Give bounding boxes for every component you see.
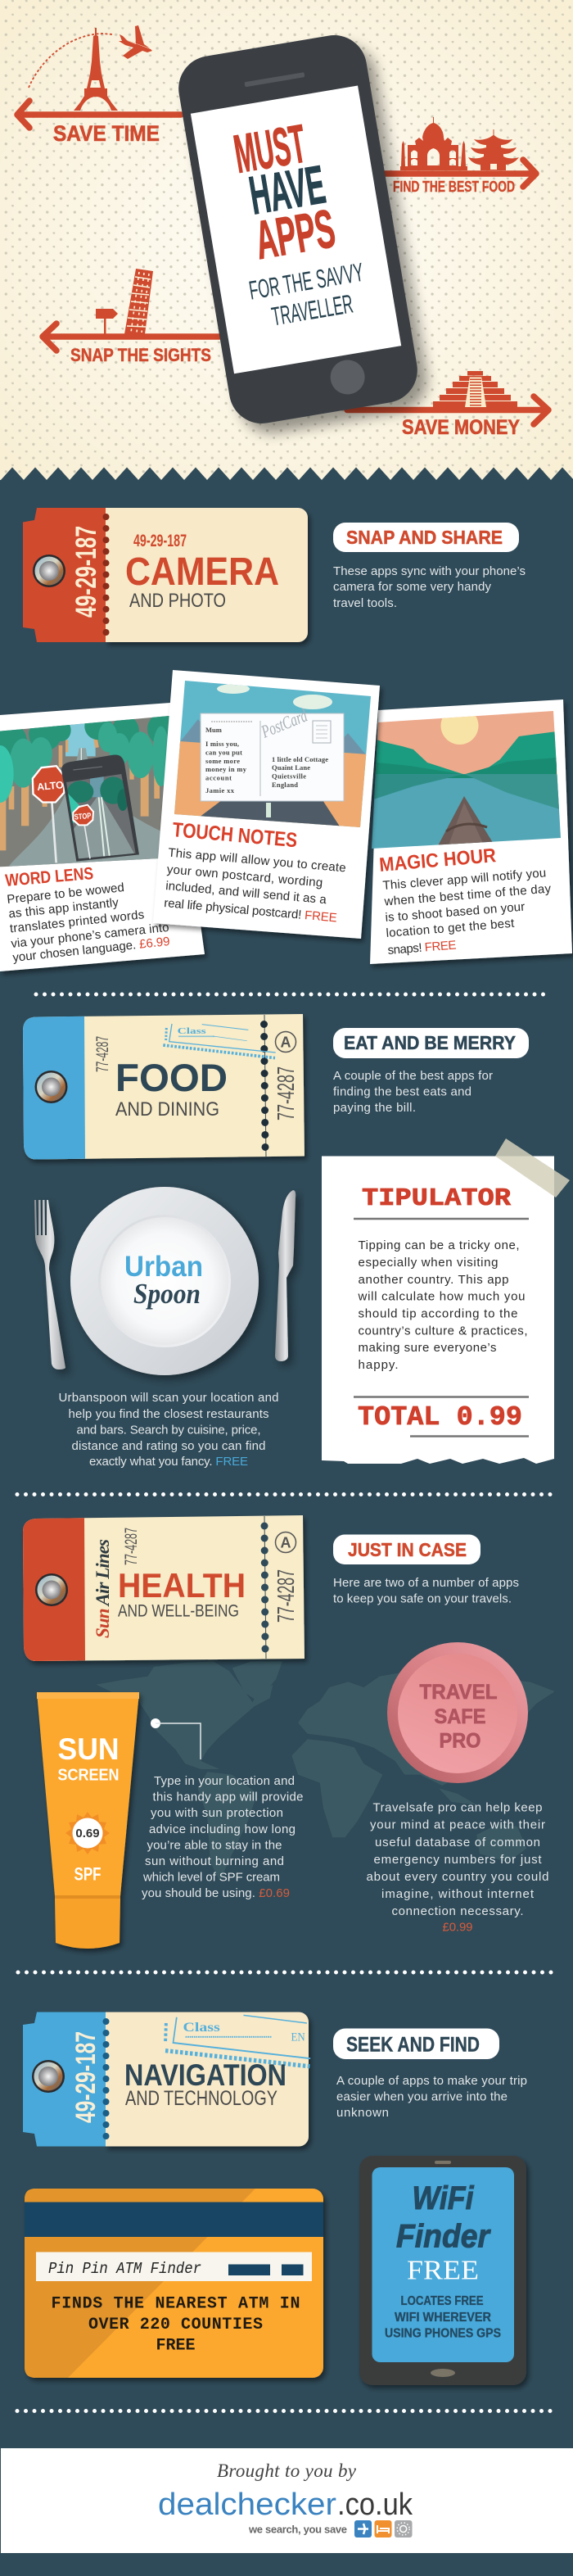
bank card: pin pin ATM finder: Pin Pin ATM Finder xyxy=(48,2260,201,2278)
bank card: pin pin ATM finder: FREE xyxy=(156,2336,195,2356)
text: travelsafe description xyxy=(367,1800,548,1935)
phone with title: APPS xyxy=(250,197,339,270)
tablet: wifi finder: LOCATES FREE xyxy=(401,2294,484,2308)
bank card: pin pin ATM finder xyxy=(25,2189,323,2378)
text: travelsafe description: Travelsafe pro can help keep xyxy=(373,1800,542,1815)
ticket: food and dining: 77-4287 xyxy=(93,1036,112,1072)
tablet: wifi finder: Finder xyxy=(396,2218,491,2254)
polaroid: word lens: Prepare to be wowed xyxy=(7,881,125,907)
heading: eat and be merry xyxy=(333,1028,529,1058)
ticket: health and well-being: A xyxy=(280,1535,291,1551)
bank card: pin pin ATM finder: OVER 220 COUNTIES xyxy=(88,2316,263,2334)
footer: dealchecker xyxy=(1,2448,573,2553)
road scene with phone and stop signs: STOP xyxy=(74,812,92,822)
polaroid: touch notes: real life physical postcard! FREE xyxy=(164,896,337,925)
postcard: Mum xyxy=(205,726,222,734)
polaroid: touch notes: This app will allow you to create xyxy=(168,846,346,875)
receipt: tipulator xyxy=(322,1139,570,1464)
receipt: tipulator: should tip according to the xyxy=(359,1307,517,1320)
text: sun protection description: Type in your location and xyxy=(154,1774,295,1788)
polaroid: word lens: as this app instantly xyxy=(8,895,120,921)
ticket: navigation and technology: NAVIGATION xyxy=(124,2058,286,2092)
heading: eat and be merry: EAT AND BE MERRY xyxy=(344,1032,516,1053)
ticket: health and well-being: 77-4287 xyxy=(122,1528,141,1565)
postcard: I miss you, xyxy=(205,740,239,748)
tablet: wifi finder: WiFi xyxy=(413,2180,474,2216)
postcard: can you put xyxy=(205,749,242,757)
phone with title xyxy=(174,30,432,438)
text: navigation intro: easier when you arrive into the xyxy=(336,2090,508,2103)
text: travelsafe description: connection necessary. xyxy=(391,1904,524,1918)
tablet: wifi finder: USING PHONES GPS xyxy=(385,2326,501,2341)
pill: travel safe pro xyxy=(387,1642,528,1783)
phone with title: MUST xyxy=(230,113,310,184)
ticket: camera and photo: CAMERA xyxy=(125,550,279,594)
polaroid: magic hour: snaps! FREE xyxy=(387,938,457,958)
text: camera intro: camera for some very handy xyxy=(333,580,491,594)
text: navigation intro xyxy=(336,2074,527,2120)
ticket: camera and photo: AND PHOTO xyxy=(129,590,226,612)
arrow: save money with stepped pyramid: SAVE MONEY xyxy=(402,416,520,439)
arrow: snap the sights with Pisa tower: SNAP THE SIGHTS xyxy=(70,345,211,365)
postcard: some more xyxy=(205,757,240,765)
postcard: Quietsville xyxy=(272,772,306,780)
arrow: find the best food with Taj Mahal and pagoda: FIND THE BEST FOOD xyxy=(393,179,515,195)
plate: urban spoon xyxy=(70,1187,259,1375)
ticket: camera and photo xyxy=(23,508,308,642)
receipt: tipulator: especially when visiting xyxy=(359,1256,498,1270)
receipt: tipulator: will calculate how much you xyxy=(357,1289,526,1304)
text: urbanspoon description: help you find the closest restaurants xyxy=(69,1407,268,1421)
postcard: account xyxy=(205,773,232,781)
text: sun protection description: you should be using. £0.69 xyxy=(142,1886,290,1900)
text: travelsafe description: your mind at peace with their xyxy=(370,1818,545,1831)
pill: travel safe pro: TRAVEL xyxy=(419,1681,498,1704)
text: sun protection description: you with sun protection xyxy=(151,1806,283,1820)
text: travelsafe description: useful database of common xyxy=(375,1836,540,1849)
phone with title: HAVE xyxy=(245,153,329,226)
heading: seek and find xyxy=(333,2028,499,2059)
text: travelsafe description: imagine, without internet xyxy=(381,1887,535,1901)
ticket: food and dining: FOOD xyxy=(115,1056,228,1099)
postcard: England xyxy=(272,781,298,789)
tablet: wifi finder: WIFI WHEREVER xyxy=(395,2311,491,2325)
ticket: health and well-being: HEALTH xyxy=(118,1566,246,1605)
pill: travel safe pro: SAFE xyxy=(434,1705,486,1728)
arrow: save time with Eiffel Tower and plane xyxy=(17,25,181,146)
ticket: health and well-being: Sun Air Lines xyxy=(92,1539,113,1638)
receipt: tipulator: TOTAL 0.99 xyxy=(358,1402,522,1433)
text: urbanspoon description: Urbanspoon will scan your location and xyxy=(59,1391,278,1405)
text: navigation intro: A couple of apps to make your trip xyxy=(336,2074,527,2088)
text: urbanspoon description xyxy=(59,1391,278,1469)
polaroid: touch notes: included, and will send it as a xyxy=(165,879,327,907)
ticket: food and dining xyxy=(23,1014,305,1160)
postcard: Quaint Lane xyxy=(272,763,310,772)
text: sun protection description: this handy app will provide xyxy=(152,1791,303,1804)
stamp xyxy=(163,1024,276,1058)
icon: hotels xyxy=(375,2520,391,2538)
text: sun protection description: you’re able to stay in the xyxy=(147,1838,282,1853)
badge: price sunburst xyxy=(65,1812,110,1854)
lake scene with boat xyxy=(372,711,561,849)
heading: seek and find: SEEK AND FIND xyxy=(346,2033,480,2056)
ticket: camera and photo: 49-29-187 xyxy=(133,532,187,550)
postcard: Jamie xx xyxy=(205,786,235,795)
receipt: tipulator: TIPULATOR xyxy=(362,1184,511,1213)
phone with title: TRAVELLER xyxy=(269,288,355,331)
road scene with phone and stop signs xyxy=(0,716,169,867)
plate: urban spoon: Urban xyxy=(124,1251,203,1283)
text: health intro xyxy=(333,1576,519,1605)
polaroid: word lens xyxy=(0,703,205,971)
text: camera intro: These apps sync with your phone’s xyxy=(333,564,526,578)
text: camera intro: travel tools. xyxy=(333,596,397,610)
text: food intro xyxy=(333,1069,493,1115)
receipt: tipulator: Tipping can be a tricky one, xyxy=(359,1238,519,1252)
heading: just in case xyxy=(333,1535,481,1564)
polaroid: touch notes: TOUCH NOTES xyxy=(171,818,298,852)
phone with title: FOR THE SAVVY xyxy=(247,257,366,306)
postcard: money in my xyxy=(205,765,247,773)
tape xyxy=(495,1139,570,1197)
receipt: tipulator: another country. This app xyxy=(359,1273,509,1287)
polaroid: magic hour: MAGIC HOUR xyxy=(378,844,497,876)
receipt: tipulator: country’s culture & practices, xyxy=(359,1324,527,1338)
ticket: food and dining: AND DINING xyxy=(115,1098,219,1120)
polaroid: magic hour: This clever app will notify you xyxy=(382,866,547,893)
text: travelsafe description: emergency numbers for just xyxy=(373,1853,542,1867)
text: sun protection description xyxy=(142,1774,303,1900)
arrow: find the best food with Taj Mahal and pagoda xyxy=(383,117,536,195)
sunscreen tube: SUN xyxy=(57,1732,120,1766)
icon: holidays xyxy=(395,2520,413,2538)
text: food intro: finding the best eats and xyxy=(333,1084,471,1099)
text: travelsafe description: £0.99 xyxy=(442,1920,473,1935)
ticket: camera and photo: 49-29-187 xyxy=(70,526,102,618)
arrow: save money with stepped pyramid xyxy=(347,371,548,439)
icon: knife xyxy=(275,1190,296,1361)
plate: urban spoon: Spoon xyxy=(133,1278,201,1310)
polaroid: magic hour xyxy=(368,699,572,964)
stamp: Class xyxy=(178,1027,206,1036)
stamp xyxy=(165,2015,310,2067)
ticket: navigation and technology: AND TECHNOLOGY xyxy=(125,2087,277,2110)
heading: snap and share: SNAP AND SHARE xyxy=(346,527,503,548)
text: travelsafe description: about every country you could xyxy=(367,1870,548,1884)
ticket: food and dining: 77-4287 xyxy=(273,1066,300,1120)
world map xyxy=(96,1661,555,1881)
polaroid: word lens: via your phone’s camera into xyxy=(11,921,169,951)
postcard: 1 little old Cottage xyxy=(272,755,328,763)
text: camera intro xyxy=(333,564,526,610)
ticket: food and dining: A xyxy=(280,1034,291,1050)
text: sun protection description: which level of SPF cream xyxy=(142,1871,280,1884)
heading: snap and share xyxy=(333,523,519,552)
ticket: health and well-being: 77-4287 xyxy=(273,1569,300,1623)
receipt: tipulator: happy. xyxy=(359,1358,398,1372)
road scene with phone and stop signs: ALTO xyxy=(37,779,65,793)
text: health intro: Here are two of a number of apps xyxy=(333,1576,519,1590)
polaroid: magic hour: is to shoot based on your xyxy=(385,900,526,925)
polaroid: magic hour: when the best time of the day xyxy=(383,881,552,909)
tablet: wifi finder: FREE xyxy=(407,2256,479,2285)
postcard xyxy=(201,704,344,801)
arrow: save time with Eiffel Tower and plane: SAVE TIME xyxy=(53,121,160,146)
hero background xyxy=(0,0,573,491)
text: food intro: paying the bill. xyxy=(333,1101,416,1115)
arrow: snap the sights with Pisa tower xyxy=(43,269,219,365)
badge: price sunburst: 0.69 xyxy=(75,1827,100,1840)
stamp: Class xyxy=(183,2021,220,2035)
sunscreen tube xyxy=(37,1692,139,1949)
polaroid: word lens: translates printed words xyxy=(9,908,145,935)
icon: flights xyxy=(354,2520,372,2538)
sunscreen tube: SPF xyxy=(74,1864,102,1884)
connector line xyxy=(151,1718,201,1759)
text: urbanspoon description: distance and rating so you can find xyxy=(72,1439,265,1453)
postcard: PostCard xyxy=(258,704,310,742)
text: urbanspoon description: and bars. Search by cuisine, price, xyxy=(77,1424,260,1437)
polaroid: touch notes xyxy=(153,670,381,939)
text: food intro: A couple of the best apps for xyxy=(333,1069,493,1083)
sunscreen tube: SCREEN xyxy=(57,1766,120,1784)
text: navigation intro: unknown xyxy=(336,2106,389,2120)
text: health intro: to keep you safe on your travels. xyxy=(333,1592,512,1605)
polaroid: touch notes: your own postcard, wording xyxy=(166,862,323,890)
polaroid: magic hour: location to get the best xyxy=(386,917,516,940)
receipt: tipulator: making sure everyone’s xyxy=(359,1341,496,1355)
landscape scene xyxy=(174,681,371,827)
ticket: navigation and technology: 49-29-187 xyxy=(70,2031,102,2123)
polaroid: word lens: your chosen language. £6.99 xyxy=(12,935,170,965)
footer: dealchecker: we search, you save xyxy=(248,2523,347,2536)
stamp: EN xyxy=(291,2030,305,2044)
heading: just in case: JUST IN CASE xyxy=(348,1539,467,1560)
polaroid: word lens: WORD LENS xyxy=(4,864,94,890)
tablet: wifi finder xyxy=(359,2156,526,2385)
bank card: pin pin ATM finder: FINDS THE NEAREST ATM IN xyxy=(51,2295,300,2313)
pill: travel safe pro: PRO xyxy=(439,1730,481,1753)
footer: dealchecker: .co.uk xyxy=(337,2488,413,2522)
text: sun protection description: sun without burning and xyxy=(145,1854,284,1868)
text: urbanspoon description: exactly what you fancy. FREE xyxy=(89,1455,248,1469)
icon: fork xyxy=(34,1200,65,1369)
footer: dealchecker: dealchecker xyxy=(158,2488,336,2522)
text: sun protection description: advice including how long xyxy=(149,1822,296,1836)
ticket: health and well-being xyxy=(23,1515,305,1661)
footer: dealchecker: Brought to you by xyxy=(217,2461,357,2481)
ticket: navigation and technology xyxy=(23,2012,310,2146)
ticket: health and well-being: AND WELL-BEING xyxy=(118,1602,239,1620)
